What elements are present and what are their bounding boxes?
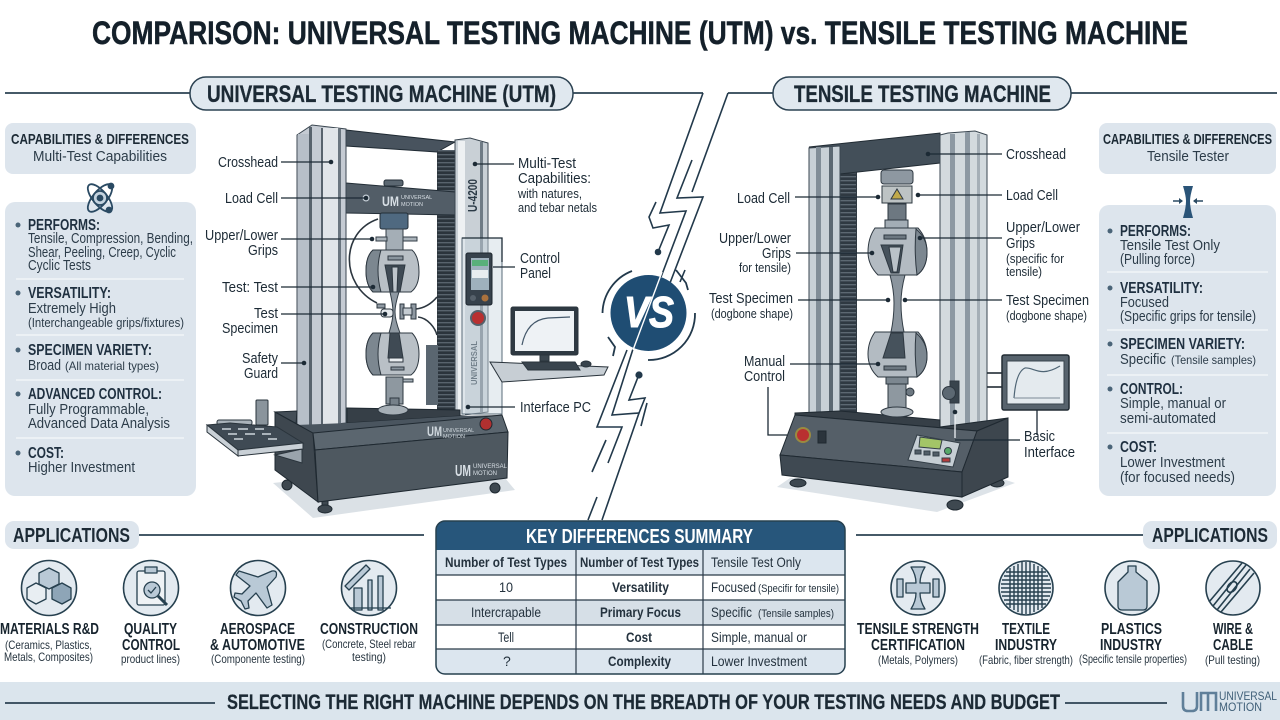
lower rod disc bbox=[378, 405, 408, 415]
right column bbox=[940, 131, 987, 427]
panel: UTM capabilities list: Extremely High bbox=[28, 301, 116, 317]
panel: UTM capabilities list: Fully Programmable, bbox=[28, 402, 149, 418]
control panel bbox=[466, 253, 492, 325]
panel: tensile capabilities list: COST: bbox=[1120, 439, 1157, 456]
panel: UTM capabilities list bbox=[5, 202, 196, 496]
panel: tensile capabilities list: CONTROL: bbox=[1120, 381, 1183, 398]
labels: tensile right callouts: Test Specimen bbox=[1006, 293, 1089, 309]
panel: UTM capabilities header: CAPABILITIES & DIFFERENCES bbox=[11, 131, 189, 148]
labels: tensile left callouts: (dogbone shape) bbox=[711, 307, 793, 321]
labels: UTM left callouts: Guard bbox=[244, 366, 278, 382]
panel: tensile capabilities list: Lower Investment bbox=[1120, 455, 1225, 471]
specimen bbox=[389, 292, 400, 333]
panel: UTM capabilities list: Broad bbox=[28, 358, 61, 374]
application: construction: CONSTRUCTION bbox=[320, 621, 418, 638]
application: textile industry bbox=[979, 561, 1073, 667]
floor shadow bbox=[777, 478, 1015, 512]
table: key differences summary: Number of Test Types bbox=[580, 554, 699, 570]
table: key differences summary: Focused bbox=[711, 579, 756, 595]
labels: tensile left callouts: Load Cell bbox=[737, 191, 790, 207]
application: wire and cable bbox=[1205, 561, 1260, 667]
base logos: UM bbox=[427, 423, 442, 439]
application: tensile strength certification: (Metals, Polymers) bbox=[878, 653, 958, 667]
panel: UTM capabilities list: Advanced Data Analysis bbox=[28, 416, 170, 432]
control keypad bbox=[908, 435, 960, 467]
application: construction bbox=[320, 560, 418, 664]
labels: UTM left callouts: Safety bbox=[242, 351, 279, 367]
labels: UTM left callouts: Grips bbox=[248, 243, 278, 259]
panel: tensile capabilities header: Tensile Tester bbox=[1147, 148, 1229, 165]
side tray bbox=[207, 400, 303, 463]
panel: tensile capabilities list: VERSATILITY: bbox=[1120, 280, 1203, 297]
panel: tensile capabilities list: Focused bbox=[1120, 295, 1169, 311]
base logos: UNIVERSAL bbox=[473, 464, 508, 470]
panel: tensile capabilities list: (Tensile samples) bbox=[1171, 353, 1256, 367]
footer banner bbox=[0, 682, 1280, 720]
load cell stack bbox=[881, 170, 913, 228]
base logos: MOTION bbox=[401, 202, 423, 208]
labels: UTM left callouts: Upper/Lower bbox=[205, 228, 278, 244]
panel: tensile capabilities header bbox=[1099, 123, 1276, 174]
glass safety guard bbox=[462, 238, 502, 414]
application: wire and cable: WIRE & bbox=[1213, 621, 1253, 638]
lower rod bbox=[386, 377, 413, 406]
base bbox=[780, 411, 1008, 510]
application: construction: testing) bbox=[352, 650, 386, 664]
application: wire and cable: (Pull testing) bbox=[1205, 653, 1260, 667]
table: key differences summary: Number of Test Types bbox=[445, 554, 567, 570]
panel: UTM capabilities list: Higher Investment bbox=[28, 460, 135, 476]
lower rod bbox=[886, 377, 914, 408]
panel: UTM capabilities list: Cyclic Tests bbox=[28, 258, 91, 274]
table: key differences summary: Simple, manual or bbox=[711, 629, 807, 645]
application: textile industry: (Fabric, fiber strength) bbox=[979, 653, 1073, 667]
panel: tensile capabilities list: (for focused needs) bbox=[1120, 470, 1235, 486]
labels: tensile right callouts bbox=[903, 147, 1089, 461]
base logos: UM bbox=[455, 463, 471, 480]
logo: Universal Motion: MOTION bbox=[1219, 702, 1262, 714]
labels: UTM right callouts: and tebar netals bbox=[518, 201, 597, 215]
labels: tensile right callouts: Basic bbox=[1024, 429, 1055, 445]
application: tensile strength certification: CERTIFICATION bbox=[871, 637, 965, 654]
extensometer bbox=[377, 304, 416, 319]
labels: tensile left callouts: Grips bbox=[762, 246, 791, 262]
labels: tensile left callouts: Manual bbox=[744, 354, 785, 370]
labels: tensile left callouts: for tensile) bbox=[739, 261, 791, 275]
table: key differences summary: Cost bbox=[626, 629, 652, 645]
panel: tensile capabilities list: PERFORMS: bbox=[1120, 223, 1191, 240]
column limit switch bbox=[942, 381, 959, 403]
table: key differences summary: Intercrapable bbox=[471, 604, 541, 620]
panel: tensile capabilities list: semi-automated bbox=[1120, 411, 1216, 427]
application: quality control: product lines) bbox=[121, 652, 180, 666]
panel: UTM capabilities list: PERFORMS: bbox=[28, 217, 100, 234]
labels: tensile left callouts bbox=[709, 191, 890, 435]
VS badge: VS bbox=[624, 288, 674, 337]
left column bbox=[809, 146, 840, 414]
application: aerospace and automotive bbox=[210, 560, 305, 666]
labels: tensile right callouts: Interface bbox=[1024, 445, 1075, 461]
table: key differences summary bbox=[436, 521, 845, 674]
lower rod disc bbox=[881, 407, 913, 417]
heading: tensile bbox=[728, 77, 1277, 110]
application: tensile strength certification: TENSILE STRENGTH bbox=[857, 621, 979, 638]
table: key differences summary: (Specifir for tensile) bbox=[758, 583, 839, 595]
panel: tensile capabilities list: Tensile Test Only bbox=[1120, 238, 1221, 254]
top beam bbox=[346, 130, 455, 152]
labels: UTM left callouts: Test bbox=[254, 306, 278, 322]
labels: UTM left callouts: Crosshead bbox=[218, 155, 278, 171]
footer banner: SELECTING THE RIGHT MACHINE DEPENDS ON THE BREADTH OF YOUR TESTING NEEDS AND BUDGET bbox=[227, 691, 1060, 714]
panel: UTM capabilities list: (All material types) bbox=[65, 359, 159, 373]
panel: UTM capabilities list: Shear, Peeling, Creep, Cyclic bbox=[28, 245, 176, 261]
logo: Universal Motion bbox=[1183, 691, 1278, 714]
table: key differences summary: (Tensile samples) bbox=[758, 608, 834, 620]
monitor bbox=[987, 355, 1069, 410]
labels: UTM right callouts: Multi-Test bbox=[518, 156, 576, 172]
application: aerospace and automotive: & AUTOMOTIVE bbox=[210, 637, 305, 654]
panel: UTM capabilities list: COST: bbox=[28, 445, 64, 462]
application: textile industry: TEXTILE bbox=[1002, 621, 1050, 638]
panel: tensile capabilities list: (Specific grips for tensile) bbox=[1120, 309, 1256, 325]
application: wire and cable: CABLE bbox=[1213, 637, 1253, 654]
application: plastics industry: (Specific tensile properties) bbox=[1079, 652, 1187, 666]
heading: UTM bbox=[5, 77, 703, 110]
labels: tensile right callouts: Crosshead bbox=[1006, 147, 1066, 163]
application: plastics industry bbox=[1079, 561, 1187, 666]
ribbed column screw bbox=[437, 150, 455, 418]
application: quality control: CONTROL bbox=[122, 637, 180, 654]
labels: UTM left callouts: Specimen bbox=[222, 321, 278, 337]
lower grip bbox=[868, 332, 927, 377]
load cell and rods bbox=[376, 213, 417, 250]
upper grip bbox=[868, 228, 927, 275]
wires bbox=[349, 219, 437, 335]
base logos bbox=[382, 193, 508, 480]
panel: tensile capabilities list bbox=[1099, 205, 1276, 496]
right column: U-4200 bbox=[466, 179, 480, 212]
labels: tensile right callouts: (specific for bbox=[1006, 252, 1064, 266]
labels: tensile right callouts: (dogbone shape) bbox=[1006, 309, 1087, 323]
table: key differences summary: Tensile Test Only bbox=[711, 554, 801, 570]
labels: tensile right callouts: Grips bbox=[1006, 236, 1035, 252]
heading: tensile: TENSILE TESTING MACHINE bbox=[794, 81, 1051, 108]
labels: tensile left callouts: Upper/Lower bbox=[719, 231, 791, 247]
labels: tensile right callouts: Load Cell bbox=[1006, 188, 1058, 204]
table: key differences summary: 10 bbox=[499, 579, 513, 595]
application: plastics industry: PLASTICS bbox=[1101, 621, 1162, 638]
table: key differences summary: KEY DIFFERENCES SUMMARY bbox=[526, 526, 754, 548]
table: key differences summary: Versatility bbox=[612, 579, 669, 595]
panel: UTM capabilities list: ADVANCED CONTROL: bbox=[28, 386, 162, 403]
left column bbox=[297, 125, 346, 428]
PC monitor and desk bbox=[490, 307, 608, 382]
application: plastics industry: INDUSTRY bbox=[1100, 637, 1163, 654]
upper grip bbox=[366, 250, 419, 292]
floor shadow bbox=[273, 478, 515, 518]
icon: atom bbox=[84, 180, 116, 216]
application: textile industry: INDUSTRY bbox=[995, 637, 1058, 654]
panel: tensile capabilities list: (Pulling force) bbox=[1120, 252, 1195, 268]
table: key differences summary: Complexity bbox=[608, 653, 671, 669]
labels: UTM right callouts: Control bbox=[520, 251, 560, 267]
labels: UTM right callouts: Capabilities: bbox=[518, 171, 591, 187]
right column bbox=[455, 138, 488, 416]
application: materials R&D bbox=[0, 560, 99, 664]
panel: tensile capabilities list: Specific bbox=[1120, 352, 1166, 368]
panel: UTM capabilities list: Tensile, Compression, Bending, bbox=[28, 231, 193, 247]
base logos: MOTION bbox=[443, 434, 465, 440]
panel: UTM capabilities list: VERSATILITY: bbox=[28, 285, 111, 302]
labels: UTM left callouts bbox=[205, 155, 387, 382]
table: key differences summary: Tell bbox=[498, 629, 514, 645]
base logos: UM bbox=[382, 193, 399, 209]
lower grip bbox=[366, 333, 419, 375]
application: materials R&D: MATERIALS R&D bbox=[0, 621, 99, 638]
top beam bbox=[809, 133, 940, 174]
illustration: universal testing machine bbox=[207, 125, 608, 518]
labels: tensile right callouts: tensile) bbox=[1006, 265, 1042, 279]
labels: UTM right callouts: with natures, bbox=[517, 187, 582, 201]
base logos: UNIVERSAL bbox=[443, 428, 474, 434]
ribbed column bbox=[840, 172, 857, 415]
application: aerospace and automotive: (Componente testing) bbox=[211, 652, 305, 666]
panel: UTM capabilities list: (Interchangeable grips/fixtures) bbox=[28, 315, 184, 330]
base logos: UNIVERSAL bbox=[401, 195, 432, 201]
base bbox=[275, 408, 508, 513]
rear box bbox=[426, 345, 438, 405]
labels: UTM left callouts: Load Cell bbox=[225, 191, 278, 207]
panel: tensile capabilities list: SPECIMEN VARIETY: bbox=[1120, 336, 1245, 353]
table: key differences summary: Lower Investment bbox=[711, 653, 807, 669]
table: key differences summary: Specific bbox=[711, 604, 752, 620]
heading: applications left: APPLICATIONS bbox=[13, 525, 130, 547]
application: quality control bbox=[121, 560, 180, 666]
VS badge bbox=[602, 270, 695, 360]
labels: tensile left callouts: Test Specimen bbox=[709, 291, 793, 307]
right column: UNIVERSAL bbox=[469, 341, 479, 385]
application: quality control: QUALITY bbox=[124, 621, 178, 638]
specimen bbox=[890, 275, 905, 332]
heading: applications left bbox=[5, 521, 424, 549]
table: key differences summary: ? bbox=[503, 653, 511, 669]
icon: dogbone specimen bbox=[1173, 186, 1203, 218]
application: materials R&D: Metals, Composites) bbox=[4, 650, 93, 664]
panel: UTM capabilities header: Multi-Test Capabilities bbox=[33, 148, 167, 165]
panel: UTM capabilities list: SPECIMEN VARIETY: bbox=[28, 342, 152, 359]
crosshead bbox=[346, 180, 455, 215]
panel: tensile capabilities list: Simple, manual or bbox=[1120, 396, 1226, 412]
labels: UTM right callouts: Panel bbox=[520, 266, 551, 282]
heading: applications right bbox=[856, 521, 1277, 549]
labels: UTM right callouts bbox=[462, 156, 597, 416]
illustration: tensile testing machine bbox=[777, 131, 1069, 512]
application: construction: (Concrete, Steel rebar bbox=[322, 637, 416, 651]
labels: tensile right callouts: Upper/Lower bbox=[1006, 220, 1080, 236]
table: key differences summary: Primary Focus bbox=[600, 604, 681, 620]
labels: UTM right callouts: Interface PC bbox=[520, 400, 591, 416]
labels: UTM left callouts: Test: Test bbox=[222, 280, 278, 296]
panel: UTM capabilities header bbox=[5, 123, 196, 174]
heading: UTM: UNIVERSAL TESTING MACHINE (UTM) bbox=[207, 81, 556, 108]
application: materials R&D: (Ceramics, Plastics, bbox=[5, 638, 92, 652]
lightning divider bbox=[588, 93, 728, 520]
application: tensile strength certification bbox=[857, 561, 979, 667]
application: aerospace and automotive: AEROSPACE bbox=[220, 621, 295, 638]
labels: tensile left callouts: Control bbox=[744, 369, 785, 385]
base logos: MOTION bbox=[473, 471, 497, 477]
